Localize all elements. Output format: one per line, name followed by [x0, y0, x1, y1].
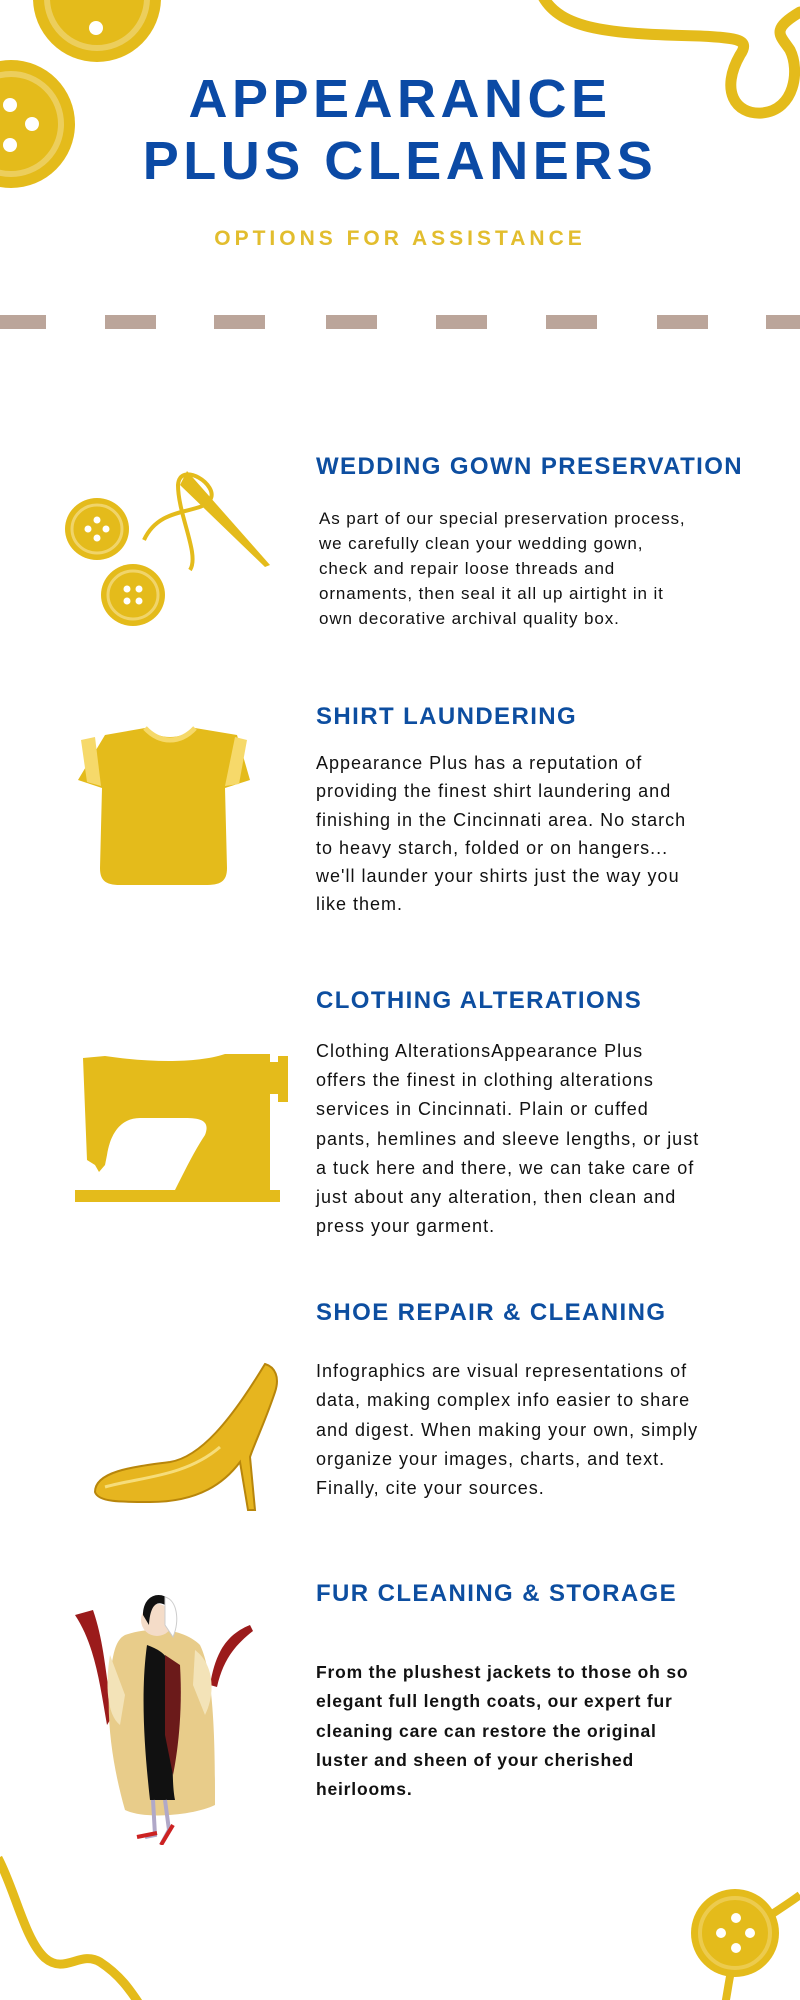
dashed divider: [0, 315, 800, 329]
title: [143, 69, 657, 191]
icon: sewing machine: [75, 1054, 288, 1202]
text: wedding gown: [319, 509, 686, 628]
text: wedding gown: As part of our special preservation process,: [319, 509, 686, 528]
icon: woman in fur coat: [75, 1595, 253, 1845]
text: shoe repair: and digest. When making your own, simply: [316, 1420, 698, 1440]
icon: t-shirt: [78, 726, 250, 885]
text: shirt laundering: Appearance Plus has a reputation of: [316, 753, 642, 773]
text: wedding gown: ornaments, then seal it all up airtight in it: [319, 584, 664, 603]
text: fur cleaning: [316, 1662, 688, 1799]
text: clothing alterations: a tuck here and there, we can take care of: [316, 1158, 694, 1178]
text: clothing alterations: [316, 1041, 699, 1236]
text: shoe repair: Finally, cite your sources.: [316, 1478, 545, 1498]
text: fur cleaning: luster and sheen of your cherished: [316, 1750, 634, 1770]
icon: high heel shoe: [94, 1362, 278, 1511]
text: shoe repair: Infographics are visual representations of: [316, 1361, 687, 1381]
text: wedding gown: check and repair loose threads and: [319, 559, 615, 578]
icon: buttons and needle: [65, 471, 270, 626]
title: APPEARANCE: [188, 69, 612, 129]
text: clothing alterations: press your garment.: [316, 1216, 495, 1236]
text: fur cleaning: heirlooms.: [316, 1779, 412, 1799]
heading: clothing alterations: CLOTHING ALTERATIONS: [316, 987, 642, 1014]
decoration: bottom-right button with thread: [691, 1889, 800, 2000]
text: shirt laundering: finishing in the Cincinnati area. No starch: [316, 810, 686, 830]
text: clothing alterations: services in Cincinnati. Plain or cuffed: [316, 1099, 649, 1119]
text: clothing alterations: Clothing AlterationsAppearance Plus: [316, 1041, 643, 1061]
heading: wedding gown: WEDDING GOWN PRESERVATION: [316, 453, 743, 480]
text: shirt laundering: we'll launder your shirts just the way you: [316, 866, 680, 886]
text: clothing alterations: just about any alteration, then clean and: [316, 1187, 676, 1207]
heading: shirt laundering: SHIRT LAUNDERING: [316, 703, 577, 730]
text: shirt laundering: to heavy starch, folded or on hangers...: [316, 838, 668, 858]
text: clothing alterations: pants, hemlines and sleeve lengths, or just: [316, 1129, 699, 1149]
text: fur cleaning: elegant full length coats, our expert fur: [316, 1691, 673, 1711]
text: shirt laundering: [316, 753, 686, 914]
text: wedding gown: we carefully clean your wedding gown,: [319, 534, 643, 553]
heading: fur cleaning: FUR CLEANING & STORAGE: [316, 1580, 677, 1607]
decoration: top-left buttons: [0, 0, 161, 188]
title: PLUS CLEANERS: [143, 131, 657, 191]
text: shoe repair: data, making complex info easier to share: [316, 1390, 690, 1410]
text: shoe repair: organize your images, charts, and text.: [316, 1449, 665, 1469]
text: fur cleaning: From the plushest jackets to those oh so: [316, 1662, 688, 1682]
decoration: top-right thread: [538, 0, 800, 119]
decoration: bottom-left thread: [0, 1856, 142, 2000]
heading: shoe repair: SHOE REPAIR & CLEANING: [316, 1299, 666, 1326]
text: wedding gown: own decorative archival quality box.: [319, 609, 620, 628]
text: shirt laundering: like them.: [316, 894, 403, 914]
subtitle: OPTIONS FOR ASSISTANCE: [214, 227, 586, 250]
text: clothing alterations: offers the finest in clothing alterations: [316, 1070, 654, 1090]
text: shirt laundering: providing the finest shirt laundering and: [316, 781, 671, 801]
text: fur cleaning: cleaning care can restore the original: [316, 1721, 657, 1741]
text: shoe repair: [316, 1361, 698, 1498]
